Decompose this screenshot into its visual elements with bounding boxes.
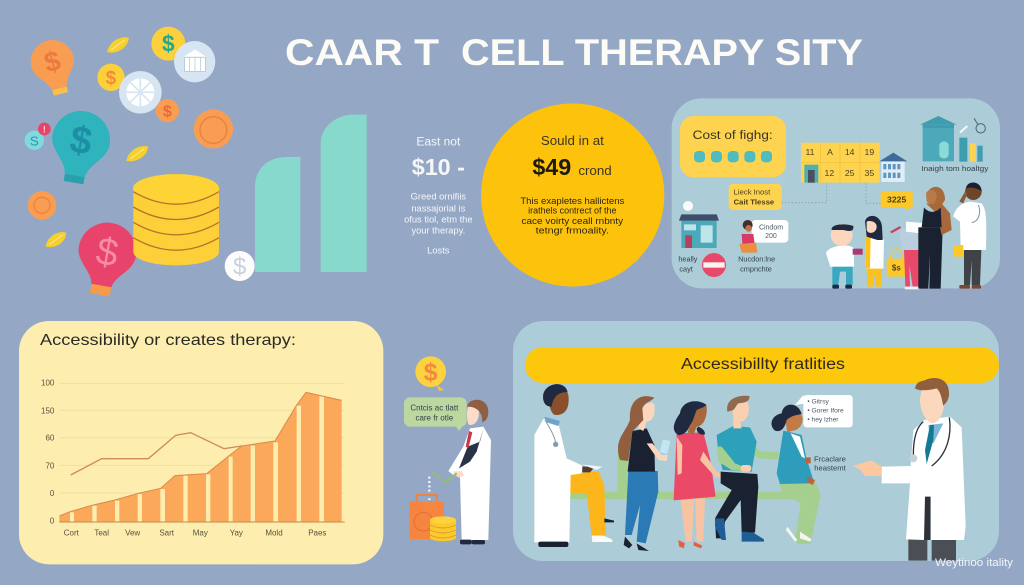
callout: check cost [729,184,782,210]
figure: tall woman [918,187,952,289]
panel: cost icons cluster [25,27,367,300]
icon: teal bulb [45,106,115,188]
figure: woman in teal jacket [772,405,821,544]
title: CELL THERAPY SITY [461,32,863,73]
figure: person with speech bubble [739,220,788,253]
figure: woman in white coat [865,216,884,287]
figure: man in teal shirt [715,396,778,542]
icon: leaf [104,35,132,55]
label: practice treatment: heastemt [814,463,847,472]
icon: coin bubble [415,356,446,391]
price: $49: $49 [532,154,571,180]
figure: woman in red dress [674,401,728,548]
table: schedule: 25 [845,168,855,178]
table: schedule: 12 [825,168,834,178]
text block: circle description: cace voirty ceall rnbnty [521,216,624,226]
bar chart: rising teal bars [255,115,367,272]
text block: low cost: $10 - [412,154,465,180]
figure: large doctor [853,378,966,561]
figure: person with speech bubble: Cindom [759,225,783,232]
price: $49: crond [578,163,612,178]
y axis labels: 60 [45,434,55,443]
icon: hospital [879,153,907,182]
text block: circle description [520,196,625,236]
text block: low cost: nassajorial is [411,203,466,213]
icon: small teal coin [25,131,44,150]
banner: accessibility [525,347,999,383]
table: schedule [801,143,880,183]
figure: woman with pattern blouse [890,222,928,289]
icon: white coin: $ [233,254,246,281]
text block: low cost: ofus tiol, etm the [404,215,473,225]
icon: yellow bag: $s [892,264,901,273]
x axis labels: May [193,529,208,538]
figure: person with speech bubble: 200 [765,233,777,240]
label: person: Nucdon:lne [738,255,775,264]
callout: white bullet bubble [795,395,853,427]
icon: leaf [123,144,151,164]
text block: low cost: East not [416,135,461,149]
x axis labels: Vew [125,529,140,538]
label: footer: Weytinoo itality [935,557,1014,569]
callout: green speech bubble: Cntcis ac tlatt [410,404,459,413]
icon: bank badge [174,41,215,82]
heading: chart: Accessibility or creates therapy: [40,332,296,349]
icon: coin stack [133,174,219,265]
label: house: cayt [679,264,693,273]
icon: orange bulb: $ [41,44,64,78]
icon: pink bulb [71,218,141,300]
figure: small doctor with bag and coins [404,356,491,544]
icon: small orange coin [156,99,179,122]
icon: coin bubble: $ [424,360,438,387]
panel: accessibility facilities [513,321,999,561]
label: person: cmpnchte [740,264,772,273]
dotted rising line [426,477,433,500]
icon: no entry [702,253,726,277]
icon: small coins [430,516,456,541]
table: schedule: 11 [805,147,815,157]
icon: teal bulb: $ [67,118,95,164]
icon: leaf [43,230,69,249]
y axis labels: 100 [41,379,55,388]
panel: accessibility chart [19,321,383,564]
label: practice treatment [814,454,847,472]
icon: orange dollar coin [97,64,125,91]
callout: white bullet bubble: • Gorer Ifore [807,408,844,415]
icon: green dollar coin [151,27,185,61]
icon: small teal coin: S [30,133,39,148]
icon: yellow bag [887,249,906,277]
text block: low cost: Greed ornifiis [411,191,466,201]
icon: orange dollar coin: $ [106,67,117,88]
line: top of bars [59,392,342,516]
icon: small orange coin: $ [163,104,172,121]
y axis labels: 150 [41,406,55,415]
y axis labels: 0 [50,489,55,498]
text block: low cost: your therapy. [411,225,465,235]
price: $49 [532,154,612,180]
panel: cost of fighting [672,98,1000,289]
callout: cost box [680,116,786,177]
callout: check cost: Cait Tlesse [734,198,774,207]
area bars [59,392,342,522]
callout: green speech bubble [404,397,467,431]
icon: pink bulb: $ [93,229,122,276]
text block: circle description: This exapletes hallictens [520,196,625,206]
icon: green dollar coin: $ [162,31,175,57]
callout: white bullet bubble: • Gitrsy [807,399,830,406]
x axis labels: Mold [265,529,283,538]
figure: child in white [826,224,863,289]
icon: house [679,201,719,248]
x axis labels: Teal [94,529,109,538]
table: schedule: A [827,147,833,157]
panel: yellow cost circle [481,103,664,287]
y axis labels: 70 [45,461,55,470]
icon: orange bulb [26,35,82,99]
heading: circle: Sould in at [541,133,604,148]
icon: red alert: ! [43,124,46,134]
callout: white bullet bubble: • hey lzher [807,416,839,423]
table: schedule: 35 [865,168,874,178]
icon: small orange dial [28,191,56,220]
icon: red alert [38,123,51,135]
icon: snowflake badge [119,71,162,114]
bench [570,452,800,499]
table: schedule: 19 [865,147,874,157]
arrow: dotted connectors [782,183,881,203]
text block: circle description: irathels contrect of the [528,206,616,216]
icon: orange dial [194,109,233,149]
x axis labels: Sart [159,529,175,538]
x axis labels: Cort [64,529,80,538]
label: house: heally [678,255,698,264]
figure: doctor on phone [953,182,986,289]
callout: check cost: Lieck Inost [734,188,771,197]
label: practice treatment: Frcaclare [814,454,846,463]
figure: small doctor [448,400,491,544]
title [285,32,863,73]
banner: accessibility: Accessibillty fratlities [681,356,845,373]
icon: white coin [225,251,255,281]
label: person [738,255,775,273]
callout: green speech bubble: care fr otle [415,414,454,423]
figure: woman with long hair [618,396,671,551]
label: house [678,255,698,273]
icon: orange bag [409,495,444,539]
callout: 3225 [881,191,913,211]
text block: circle description: tetngr frmoality. [536,226,609,236]
y axis labels: 0 [50,516,55,525]
text block: low cost [404,135,473,255]
line: second series [71,433,242,475]
x axis [59,520,345,523]
icon: green check [432,472,457,482]
icon: institution with bars [920,116,985,162]
title: CAAR T [285,32,439,73]
callout: cost box: Cost of fighg: [693,128,773,142]
grid lines [59,383,344,493]
label: institution: Inaigh tom hoaltgy [921,164,989,173]
callout: 3225: 3225 [887,194,906,204]
x axis labels: Paes [308,529,326,538]
x axis labels [64,529,326,538]
figure: seated doctor [534,384,614,547]
x axis labels: Yay [230,529,243,538]
text block: low cost: Losts [427,245,450,255]
table: schedule: 14 [845,147,855,157]
y axis labels [41,379,55,525]
